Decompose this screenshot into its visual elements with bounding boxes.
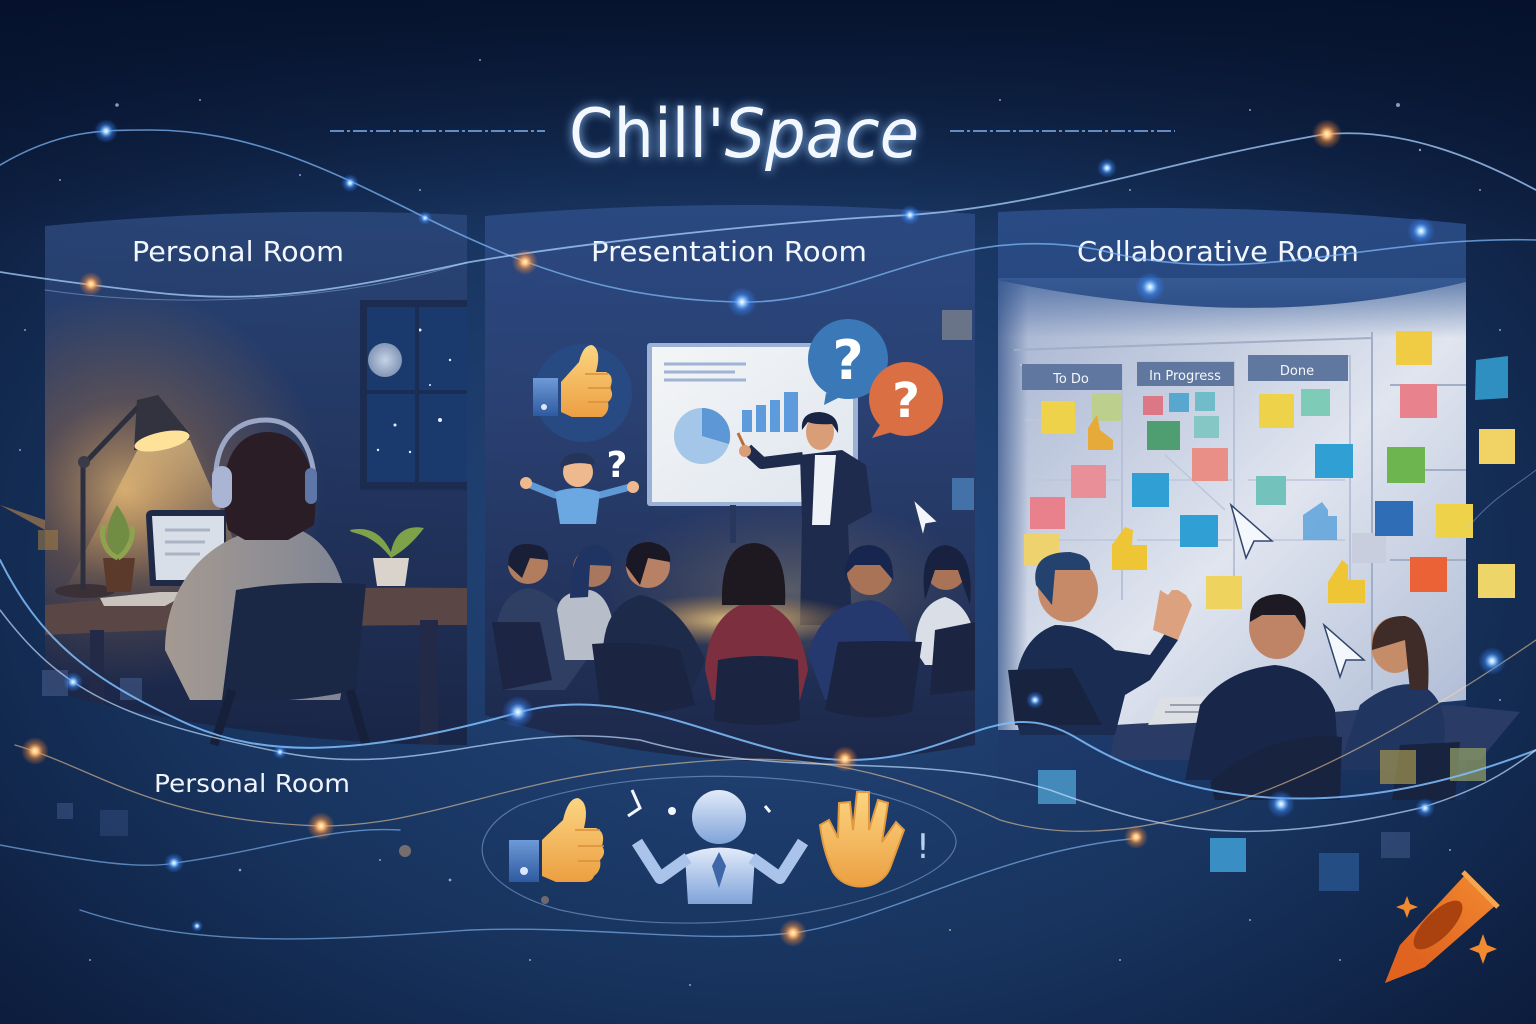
decorative squares bbox=[942, 310, 974, 510]
presenter bbox=[738, 412, 872, 625]
glowing light nodes bbox=[21, 119, 1506, 947]
confused figure: ? bbox=[607, 445, 627, 486]
audience chairs bbox=[492, 622, 975, 725]
question bubbles: ? bbox=[832, 329, 864, 392]
whiteboard bbox=[647, 343, 858, 543]
reaction icon: raised hand bbox=[820, 792, 930, 887]
laptop bbox=[100, 510, 226, 606]
person with headphones bbox=[165, 420, 350, 700]
panel: presentation room bbox=[485, 205, 980, 762]
wall bbox=[998, 280, 1466, 730]
small thumb notes bbox=[1088, 415, 1365, 603]
logo: crayon bbox=[1385, 872, 1498, 983]
table glow bbox=[610, 594, 860, 646]
window bbox=[360, 300, 467, 490]
table and papers bbox=[1110, 695, 1520, 760]
sticky notes bbox=[1024, 331, 1515, 609]
heading: presentation room: Presentation Room bbox=[591, 235, 867, 268]
chair bbox=[214, 583, 366, 745]
audience bbox=[495, 542, 975, 700]
question bubbles: ? bbox=[892, 373, 920, 429]
chairs bbox=[1008, 668, 1460, 800]
reaction icon: thumbs up bbox=[509, 798, 604, 882]
title: Chill'Space bbox=[569, 95, 919, 174]
plant on desk bbox=[103, 505, 135, 592]
heading: collaborative room: Collaborative Room bbox=[1077, 235, 1359, 268]
plant right bbox=[350, 527, 424, 586]
desk bbox=[45, 588, 467, 745]
kanban board: Done bbox=[1280, 364, 1314, 379]
cursor bbox=[913, 499, 938, 537]
kanban board: In Progress bbox=[1149, 369, 1221, 384]
title: Chill'Space bbox=[569, 95, 919, 174]
title bbox=[330, 95, 1175, 174]
floating squares bbox=[38, 530, 1486, 891]
heading: personal room: Personal Room bbox=[132, 235, 344, 268]
desk lamp bbox=[55, 395, 191, 598]
panel: personal room bbox=[0, 212, 467, 745]
kanban board bbox=[1020, 355, 1350, 600]
reaction icon: raised hand: ! bbox=[916, 827, 930, 867]
flowing light waves bbox=[0, 130, 1536, 939]
thumbs-up icon bbox=[533, 344, 632, 442]
question bubbles bbox=[808, 319, 943, 438]
cursors bbox=[1231, 505, 1364, 677]
people bbox=[1014, 552, 1445, 780]
kanban board: To Do bbox=[1052, 372, 1089, 387]
label: personal room lower: Personal Room bbox=[154, 769, 350, 798]
confused figure bbox=[520, 445, 639, 524]
reaction icon: shrugging figure bbox=[628, 790, 803, 904]
panel: collaborative room bbox=[38, 208, 1520, 891]
wall glow bbox=[45, 308, 303, 674]
